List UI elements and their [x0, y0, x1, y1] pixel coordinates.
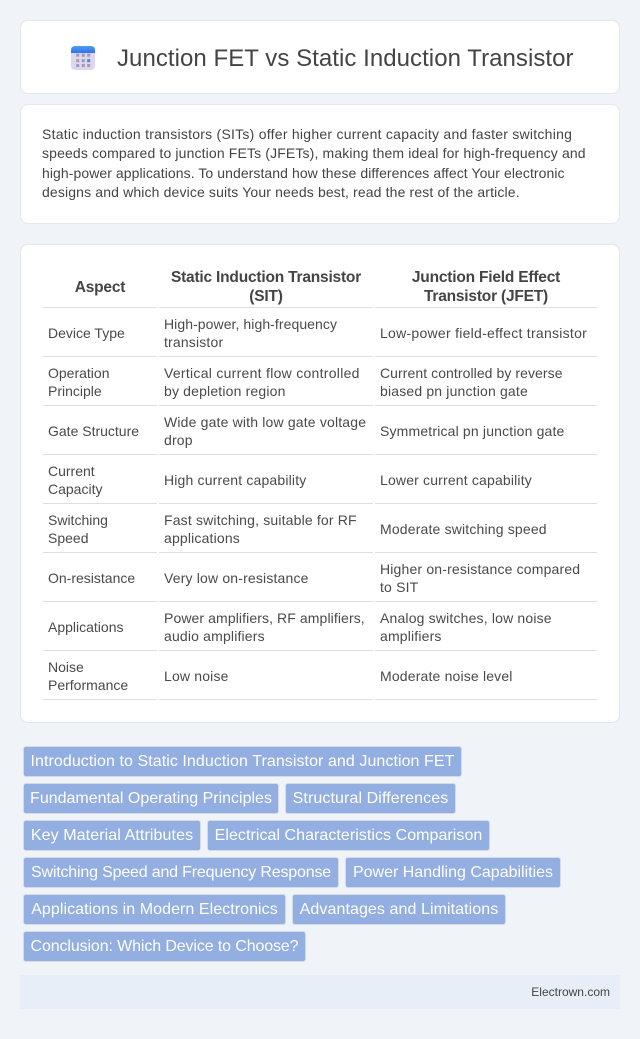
- tag: Conclusion: Which Device to Choose?: [31, 938, 298, 955]
- tag: Fundamental Operating Principles: [30, 790, 272, 807]
- tag: [23, 820, 201, 851]
- comparison table: Static Induction Transistor: [171, 269, 361, 286]
- intro text: designs and which device suits Your needs best, read the rest of the article.: [42, 184, 520, 200]
- comparison table: Symmetrical pn junction gate: [380, 423, 565, 439]
- comparison table: Moderate switching speed: [380, 521, 547, 537]
- tag: Introduction to Static Induction Transistor and Junction FET: [30, 753, 454, 770]
- footer credit: Electrown.com: [531, 985, 610, 999]
- comparison table: Operation: [48, 365, 109, 381]
- comparison table: Low noise: [164, 668, 229, 684]
- comparison table: Speed: [48, 530, 88, 546]
- comparison table: Device Type: [48, 325, 125, 341]
- comparison table: transistor: [164, 334, 223, 350]
- comparison table: by depletion region: [164, 383, 286, 399]
- comparison table: Applications: [48, 619, 124, 635]
- comparison table: applications: [164, 530, 240, 546]
- comparison table: Very low on-resistance: [164, 570, 309, 586]
- comparison table: High-power, high-frequency: [164, 316, 337, 332]
- comparison table: High current capability: [164, 472, 306, 488]
- comparison table: Moderate noise level: [380, 668, 513, 684]
- comparison table: [43, 269, 597, 700]
- comparison table: Switching: [48, 512, 108, 528]
- footer bar: [20, 975, 620, 1009]
- tag: Applications in Modern Electronics: [31, 901, 278, 918]
- comparison table: Performance: [48, 677, 128, 693]
- topic tags: [23, 746, 561, 962]
- comparison table: drop: [164, 432, 193, 448]
- comparison table: Noise: [48, 659, 84, 675]
- comparison table: Current controlled by reverse: [380, 365, 563, 381]
- comparison table: Fast switching, suitable for RF: [164, 512, 357, 528]
- tag: Electrical Characteristics Comparison: [215, 827, 482, 844]
- tag: [292, 894, 506, 925]
- comparison table: On-resistance: [48, 570, 135, 586]
- comparison table: Gate Structure: [48, 423, 139, 439]
- comparison table: amplifiers: [380, 628, 442, 644]
- tag: [285, 783, 456, 814]
- intro text: [42, 126, 586, 200]
- tag: Key Material Attributes: [31, 827, 193, 844]
- comparison table: Principle: [48, 383, 102, 399]
- tag: [345, 857, 561, 888]
- tag: [23, 746, 462, 777]
- tag: [23, 894, 286, 925]
- header panel: [20, 20, 620, 94]
- tag: [23, 783, 279, 814]
- intro text: speeds compared to junction FETs (JFETs), making them ideal for high-frequency and: [42, 145, 586, 161]
- tag: Power Handling Capabilities: [353, 864, 553, 881]
- comparison table: (SIT): [249, 288, 283, 305]
- comparison table: Lower current capability: [380, 472, 532, 488]
- title: Junction FET vs Static Induction Transistor: [117, 45, 574, 72]
- comparison table: to SIT: [380, 579, 418, 595]
- comparison table: Transistor (JFET): [424, 288, 548, 305]
- tag: [23, 931, 306, 962]
- tag: [207, 820, 490, 851]
- comparison table: Higher on-resistance compared: [380, 561, 580, 577]
- comparison table: Vertical current flow controlled: [164, 365, 360, 381]
- comparison table: biased pn junction gate: [380, 383, 528, 399]
- comparison table: Analog switches, low noise: [380, 610, 552, 626]
- comparison table: Wide gate with low gate voltage: [164, 414, 366, 430]
- tag: [23, 857, 339, 888]
- tag: Advantages and Limitations: [300, 901, 498, 918]
- comparison table: audio amplifiers: [164, 628, 265, 644]
- intro text: high-power applications. To understand how these differences affect Your electronic: [42, 165, 565, 181]
- comparison table: Capacity: [48, 481, 102, 497]
- comparison table: Low-power field-effect transistor: [380, 325, 587, 341]
- comparison table: Power amplifiers, RF amplifiers,: [164, 610, 365, 626]
- intro text: Static induction transistors (SITs) offer higher current capacity and faster switching: [42, 126, 572, 142]
- tag: Switching Speed and Frequency Response: [31, 864, 331, 881]
- comparison table panel: [20, 244, 620, 723]
- intro text panel: [20, 104, 620, 224]
- comparison table: Junction Field Effect: [412, 269, 560, 286]
- comparison table: Aspect: [75, 278, 125, 296]
- comparison table: Current: [48, 463, 95, 479]
- icon: calendar grid: [71, 46, 95, 70]
- tag: Structural Differences: [293, 790, 448, 807]
